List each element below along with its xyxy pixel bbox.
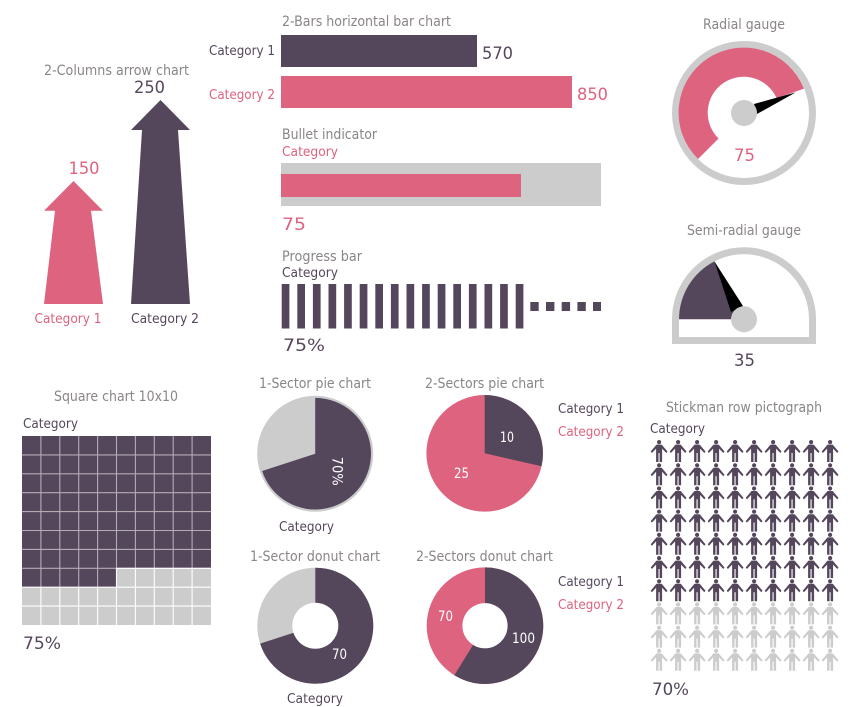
panel: 1-sector donut chart	[250, 549, 380, 707]
heading: stickman pictograph: Stickman row pictograph	[666, 400, 822, 416]
value: 10: 10	[500, 430, 514, 446]
label: category 1: Category 1	[34, 312, 102, 327]
semi gauge needle	[714, 262, 743, 312]
legend: category 1: Category 1	[558, 575, 624, 590]
stickmen: empty rows	[651, 602, 838, 671]
gauge ring	[676, 44, 812, 182]
bar: category 2	[281, 76, 572, 108]
panel: 2-sectors pie chart	[425, 376, 624, 512]
semi gauge hub	[731, 306, 757, 332]
value: 25: 25	[454, 466, 469, 482]
panel: 2-columns arrow chart	[34, 63, 199, 327]
label: category: Category	[287, 692, 343, 707]
semi gauge sector	[679, 261, 744, 319]
value: 75: 75	[734, 146, 755, 166]
value: 35: 35	[734, 351, 755, 371]
progress bars filled	[282, 284, 523, 328]
label: bar category 1: Category 1	[209, 44, 275, 59]
gauge hub	[731, 100, 757, 126]
label: square category: Category	[23, 417, 78, 432]
heading: square chart: Square chart 10x10	[54, 389, 178, 405]
value: 70%: 70%	[652, 680, 689, 700]
squares grey	[22, 568, 211, 625]
value: 70: 70	[438, 609, 453, 625]
heading: 1-sector donut: 1-Sector donut chart	[250, 549, 380, 565]
value: 570: 570	[482, 44, 513, 64]
value: 100: 100	[512, 631, 535, 647]
bullet track	[281, 163, 601, 206]
panel: square chart 10x10	[22, 389, 211, 654]
donut sector: category 1	[454, 567, 543, 684]
bullet fill	[281, 174, 521, 197]
arrow: category 1	[44, 181, 103, 304]
gauge needle	[754, 92, 796, 114]
panel: stickman row pictograph	[650, 400, 838, 700]
heading: 1-sector pie: 1-Sector pie chart	[259, 376, 371, 392]
value: 250: 250	[134, 78, 165, 98]
pie background	[257, 396, 373, 512]
stickmen: filled rows	[651, 440, 838, 601]
label: stickman category: Category	[650, 422, 705, 437]
legend: category 2: Category 2	[558, 598, 624, 613]
heading: progress bar: Progress bar	[282, 249, 362, 265]
donut sector	[260, 568, 373, 684]
panel: 2-sectors donut chart	[416, 549, 624, 684]
label: category 2: Category 2	[131, 312, 199, 327]
donut background	[257, 568, 373, 684]
pie sector	[262, 398, 371, 510]
legend: category 1: Category 1	[558, 402, 624, 417]
panel: 2-bars horizontal bar chart	[209, 14, 608, 108]
heading: bar chart: 2-Bars horizontal bar chart	[282, 14, 451, 30]
label: category: Category	[279, 520, 334, 535]
value: 70%: 70%	[328, 457, 344, 486]
donut hole	[292, 603, 338, 649]
donut sector: category 2	[427, 567, 543, 684]
label: progress category: Category	[282, 266, 338, 281]
panel: radial gauge	[676, 17, 812, 182]
pie sector: category 2	[426, 395, 543, 512]
heading: 2-sectors pie: 2-Sectors pie chart	[425, 376, 544, 392]
heading: radial gauge: Radial gauge	[703, 17, 785, 33]
label: bar category 2: Category 2	[209, 88, 275, 103]
panel: bullet indicator	[281, 127, 601, 235]
legend: category 2: Category 2	[558, 425, 624, 440]
value: 75%: 75%	[283, 336, 325, 356]
panel: semi-radial gauge	[676, 223, 812, 371]
label: bullet category: Category	[282, 145, 338, 160]
panel: progress bar	[282, 249, 601, 356]
heading: arrow chart: 2-Columns arrow chart	[44, 63, 189, 79]
squares dark	[22, 436, 211, 587]
bar: category 1	[281, 35, 477, 67]
value: 850: 850	[577, 85, 608, 105]
heading: bullet indicator: Bullet indicator	[282, 127, 377, 143]
heading: semi-radial gauge: Semi-radial gauge	[687, 223, 801, 239]
value: 70: 70	[332, 647, 347, 663]
panel: 1-sector pie chart	[257, 376, 373, 535]
value: 75: 75	[282, 215, 306, 235]
arrow: category 2	[131, 100, 190, 304]
heading: 2-sectors donut: 2-Sectors donut chart	[416, 549, 553, 565]
semi gauge frame	[676, 251, 812, 340]
gauge sector	[679, 48, 804, 159]
value: 75%: 75%	[23, 634, 61, 654]
value: 150: 150	[68, 159, 100, 179]
progress bars remaining	[530, 302, 601, 311]
pie sector: category 1	[485, 395, 543, 466]
donut hole	[462, 603, 508, 648]
